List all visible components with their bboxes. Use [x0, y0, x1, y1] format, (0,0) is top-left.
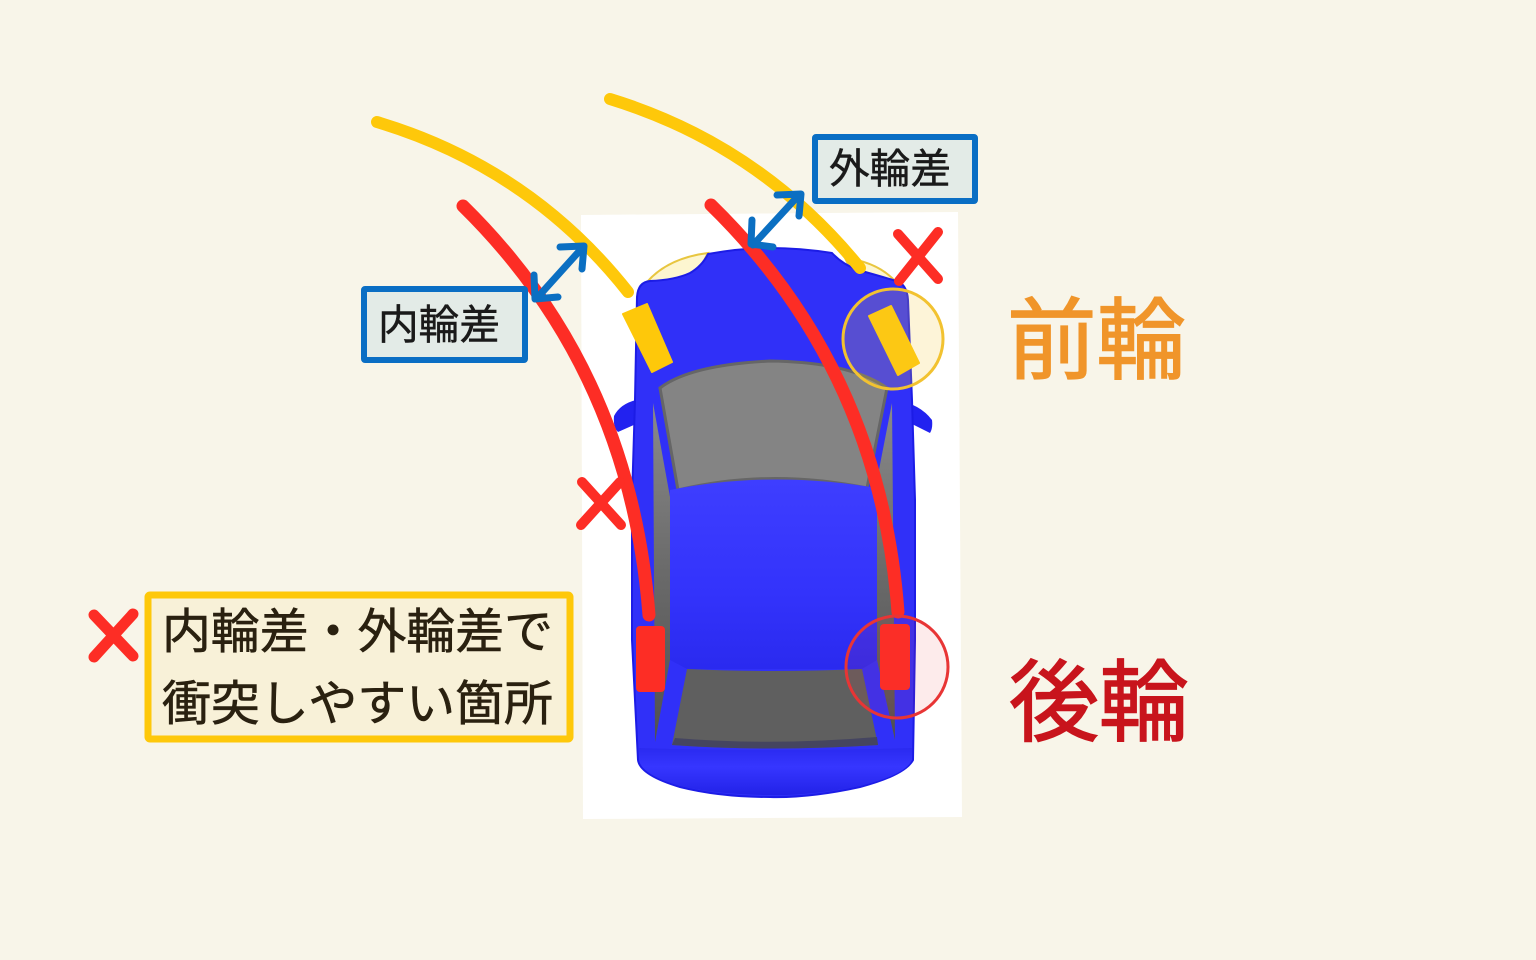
roof	[670, 479, 877, 669]
front wheel left	[623, 304, 672, 372]
front wheel right	[869, 306, 919, 375]
label: inner wheel difference: 内輪差	[378, 302, 500, 348]
mark: side collision	[581, 482, 621, 525]
side window left	[653, 403, 670, 742]
rear bumper	[639, 748, 912, 795]
label: inner wheel difference	[364, 289, 525, 360]
side window right	[877, 403, 895, 740]
rear wheel right	[880, 624, 910, 690]
inner yellow trajectory	[377, 122, 628, 292]
label: outer wheel difference	[815, 137, 975, 201]
rear wheel label: 後輪	[1009, 653, 1189, 753]
car illustration background	[581, 212, 962, 819]
mark: front collision	[898, 232, 938, 281]
mirrors	[614, 400, 932, 433]
rear wheel highlight	[846, 616, 948, 718]
mark: legend	[94, 614, 133, 657]
car body	[632, 248, 915, 797]
callout: 内輪差・外輪差で	[162, 606, 553, 659]
callout: 衝突しやすい箇所	[162, 678, 553, 731]
car	[614, 248, 932, 797]
rear wheel left	[636, 626, 665, 692]
outer red trajectory	[711, 205, 898, 612]
callout	[148, 595, 570, 739]
windshield	[660, 361, 887, 490]
headlights	[647, 253, 896, 282]
label: outer wheel difference: 外輪差	[829, 146, 951, 192]
outer yellow trajectory	[610, 99, 860, 268]
arrow: outer wheel difference	[751, 194, 801, 247]
front wheel highlight	[843, 289, 943, 389]
front wheel label: 前輪	[1007, 291, 1186, 391]
arrow: inner wheel difference	[534, 246, 584, 299]
rear window lower edge	[672, 737, 878, 748]
rear window	[672, 669, 878, 748]
inner red trajectory	[463, 206, 649, 615]
